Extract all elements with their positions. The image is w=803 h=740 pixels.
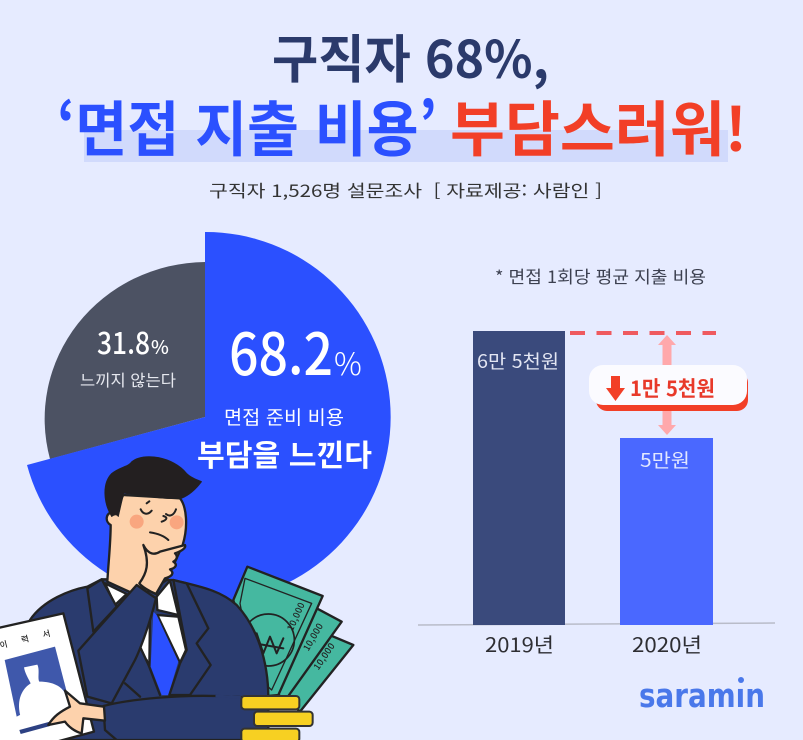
body: suit: [30, 579, 268, 740]
baseline: [418, 623, 775, 625]
resume sheet: [0, 613, 94, 740]
logo: saramin: saramın: [639, 676, 765, 715]
dashed reference line: [570, 331, 716, 335]
coins: [241, 696, 313, 740]
icon: banknotes: 10,000: [300, 621, 326, 653]
label: 68.2%: %: [334, 339, 362, 384]
bar chart: [418, 263, 775, 658]
face features: [141, 501, 176, 540]
bar: 2019: 6만 5천원: [477, 347, 559, 374]
label: 68.2%: 부담을 느낀다: [197, 431, 372, 475]
bar: 2020: [620, 438, 713, 625]
shirt collar: [105, 583, 127, 605]
resume sheet: 이 력 서: [0, 627, 52, 651]
pie chart: [27, 232, 391, 602]
lapels: [169, 580, 211, 695]
callout: difference: [589, 365, 748, 411]
lower arm: [103, 696, 268, 740]
title line 2 red: 부담스러워!: [450, 82, 747, 169]
icon: banknotes: 10,000: [310, 640, 338, 672]
bar: 2020: 5만원: [640, 446, 690, 473]
label: 68.2%: 68.2: [229, 308, 333, 392]
label: 68.2%: [197, 308, 372, 475]
label: 31.8%: 31.8: [97, 319, 150, 363]
pie slice: 68.2%: [27, 232, 391, 602]
arrow: difference: [658, 335, 676, 435]
icon: banknotes: 10,000: [284, 600, 308, 633]
year label 2019: 2019년: [485, 629, 554, 658]
title highlight band: [84, 130, 728, 162]
hand on chin: [139, 545, 185, 594]
year label 2020: 2020년: [632, 629, 702, 658]
tie: [151, 612, 178, 695]
title line 2 blue: ‘면접 지출 비용’: [57, 82, 437, 169]
label: 31.8%: %: [151, 333, 169, 360]
icon: down arrow: [606, 376, 625, 401]
pie slice: 31.8%: [45, 262, 205, 459]
label: 68.2%: 면접 준비 비용: [224, 403, 344, 430]
subtitle: 구직자 1,526명 설문조사 [ 자료제공: 사람인 ]: [209, 177, 602, 202]
cheeks: [130, 515, 144, 529]
callout: difference: 1만 5천원: [630, 373, 715, 403]
illustration: man with resume and money: [0, 457, 353, 740]
raised arm: [78, 585, 156, 703]
icon: banknotes: [233, 567, 353, 712]
hair: [105, 457, 202, 517]
title line 1: 구직자 68%,: [272, 18, 549, 93]
label: 31.8%: 느끼지 않는다: [80, 367, 176, 391]
label: 31.8%: [80, 319, 176, 391]
chart note: * 면접 1회당 평균 지출 비용: [495, 263, 706, 288]
bar: 2019: [473, 331, 565, 625]
title: [57, 18, 747, 169]
neck and face: [107, 495, 186, 597]
hand holding resume: [48, 691, 105, 733]
